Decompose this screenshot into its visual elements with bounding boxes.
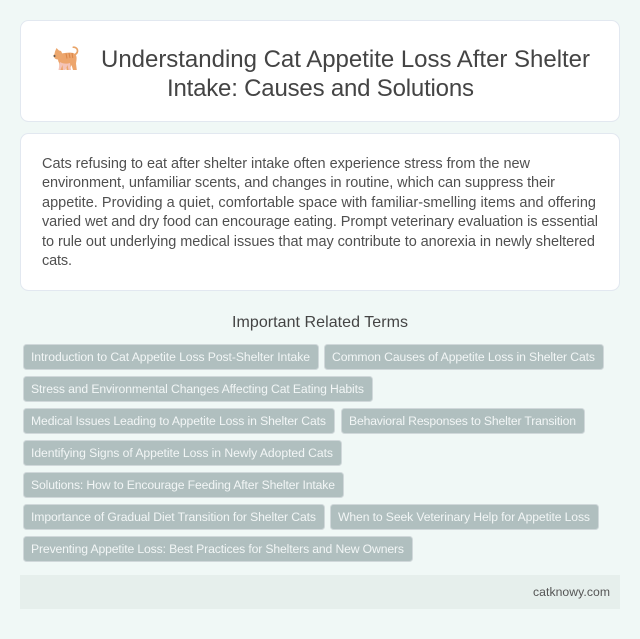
- tag: introduction: Introduction to Cat Appetite Loss Post-Shelter Intake: [31, 350, 310, 364]
- description text: to rule out underlying medical issues that may contribute to anorexia in newly sheltered: [42, 234, 595, 250]
- tag: preventing: Preventing Appetite Loss: Best Practices for Shelters and New Owners: [31, 542, 404, 556]
- description text: varied wet and dry food can encourage eating. Prompt veterinary evaluation is essential: [42, 214, 598, 230]
- tag: solutions: Solutions: How to Encourage Feeding After Shelter Intake: [31, 478, 335, 492]
- tag: preventing: [24, 536, 412, 562]
- tag: stress: [24, 376, 372, 402]
- description text: appetite. Providing a quiet, comfortable space with familiar-smelling items and offering: [42, 195, 596, 211]
- tag: behavioral responses: Behavioral Responses to Shelter Transition: [349, 414, 576, 428]
- tag: behavioral responses: [342, 408, 584, 434]
- description text: environment, unfamiliar scents, and changes in routine, which can suppress their: [42, 175, 555, 191]
- tag: solutions: [24, 472, 344, 498]
- tag: veterinary help: When to Seek Veterinary Help for Appetite Loss: [338, 510, 590, 524]
- description text: [42, 156, 598, 269]
- tag: medical issues: Medical Issues Leading to Appetite Loss in Shelter Cats: [31, 414, 326, 428]
- tag: medical issues: [24, 408, 334, 434]
- icon: cat: [53, 47, 78, 70]
- description text: cats.: [42, 253, 72, 269]
- title text: [101, 46, 590, 102]
- footer: catknowy.com: [533, 585, 610, 599]
- heading: important related terms: Important Related Terms: [232, 314, 408, 331]
- tag: common causes: [324, 344, 604, 370]
- panel: title card: [20, 20, 620, 122]
- tag: veterinary help: [330, 504, 598, 530]
- panel: description card: [20, 134, 620, 290]
- title text: Understanding Cat Appetite Loss After Shelter: [101, 46, 590, 73]
- panel: related terms tags: [24, 344, 604, 562]
- title text: Intake: Causes and Solutions: [167, 75, 474, 102]
- tag: stress: Stress and Environmental Changes Affecting Cat Eating Habits: [31, 382, 364, 396]
- description text: Cats refusing to eat after shelter intake often experience stress from the new: [42, 156, 531, 172]
- tag: identifying signs: [24, 440, 342, 466]
- tag: common causes: Common Causes of Appetite Loss in Shelter Cats: [332, 350, 595, 364]
- tag: gradual diet: [24, 504, 324, 530]
- tag: identifying signs: Identifying Signs of Appetite Loss in Newly Adopted Cats: [31, 446, 333, 460]
- tag: gradual diet: Importance of Gradual Diet Transition for Shelter Cats: [31, 510, 316, 524]
- tag: introduction: [24, 344, 318, 370]
- footer: [20, 575, 620, 609]
